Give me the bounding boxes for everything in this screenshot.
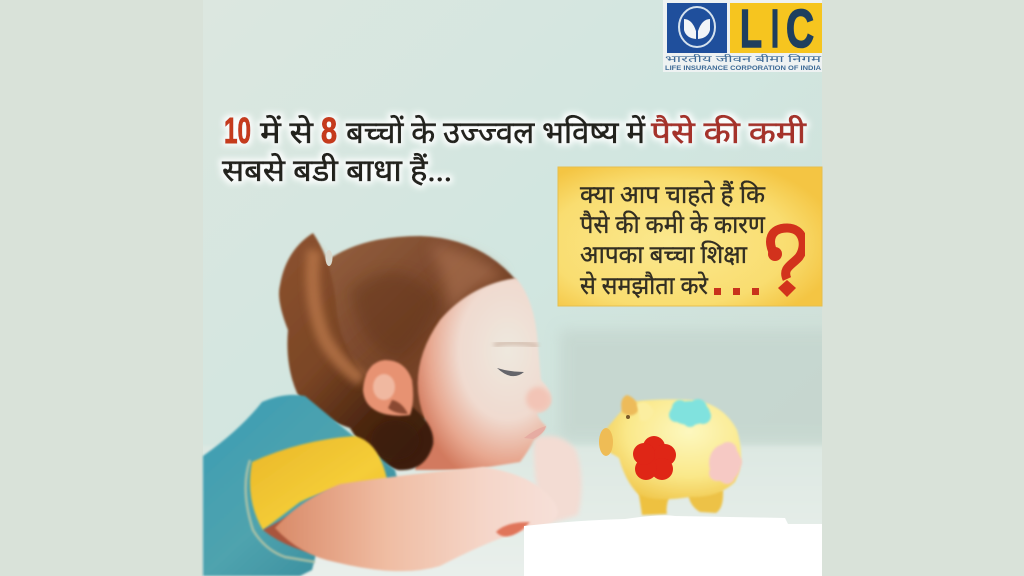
headline bbox=[222, 110, 807, 188]
girl: head hair bbox=[325, 236, 516, 420]
girl: underarm shadow bbox=[263, 510, 340, 556]
girl: arm bbox=[275, 467, 558, 571]
pig: cyan flower bbox=[669, 399, 711, 427]
headline line 1: में से bbox=[260, 115, 314, 150]
girl: sleeve trim bbox=[246, 460, 315, 562]
headline line 1: पैसे की कमी bbox=[651, 115, 807, 150]
pig: legs bbox=[637, 485, 672, 515]
girl: hair tie bbox=[326, 250, 332, 266]
logo yellow LIC square bbox=[730, 0, 822, 59]
headline line 1: 10 bbox=[224, 110, 251, 151]
pig: eye bbox=[626, 415, 630, 419]
logo English caption: LIFE INSURANCE CORPORATION OF INDIA bbox=[665, 66, 822, 72]
logo Hindi caption: भारतीय जीवन बीमा निगम bbox=[665, 53, 822, 64]
headline line 1: 8 bbox=[321, 110, 337, 151]
callout text: पैसे की कमी के कारण bbox=[580, 210, 766, 239]
callout text: आपका बच्चा शिक्षा bbox=[580, 240, 748, 269]
girl: nose bbox=[526, 387, 550, 411]
callout text: क्या आप चाहते हैं कि bbox=[580, 180, 766, 209]
logo yellow LIC square: L bbox=[740, 0, 762, 59]
pig: body bbox=[604, 399, 741, 499]
logo blue emblem square bbox=[667, 3, 727, 53]
logo yellow LIC square: C bbox=[786, 0, 814, 59]
girl: face bbox=[415, 278, 551, 470]
girl: ear bbox=[363, 360, 413, 416]
girl: lips bbox=[524, 426, 546, 439]
pig: pink flower bbox=[709, 442, 742, 484]
girl: eyebrow bbox=[494, 343, 538, 346]
pig: red flower bbox=[633, 436, 676, 480]
girl: ponytail bbox=[279, 233, 433, 470]
girl: eyelid bbox=[497, 368, 524, 376]
callout text bbox=[580, 180, 766, 300]
girl: denim dress bbox=[203, 395, 400, 576]
pig: ear bbox=[621, 395, 639, 416]
yellow question callout bbox=[558, 167, 822, 306]
red question mark bbox=[768, 228, 803, 297]
callout text: से समझौता करे bbox=[580, 271, 709, 300]
red dots bbox=[714, 288, 759, 295]
girl: yellow sleeve bbox=[250, 436, 388, 530]
pig: second ear bbox=[637, 402, 654, 421]
piggy bank bbox=[599, 395, 742, 515]
headline line 1 bbox=[224, 110, 807, 151]
girl: far hand bbox=[534, 436, 582, 525]
pig: snout bbox=[599, 428, 613, 456]
LIC logo bbox=[663, 0, 822, 72]
girl illustration bbox=[203, 233, 582, 576]
headline line 1: बच्चों के उज्ज्वल भविष्य में bbox=[346, 115, 645, 150]
logo yellow LIC square: I bbox=[771, 0, 779, 59]
white paper block bbox=[524, 515, 822, 576]
headline line 2: सबसे बडी बाधा हैं... bbox=[222, 153, 452, 188]
photo panel background bbox=[203, 72, 822, 576]
girl: fingers bbox=[496, 522, 530, 537]
